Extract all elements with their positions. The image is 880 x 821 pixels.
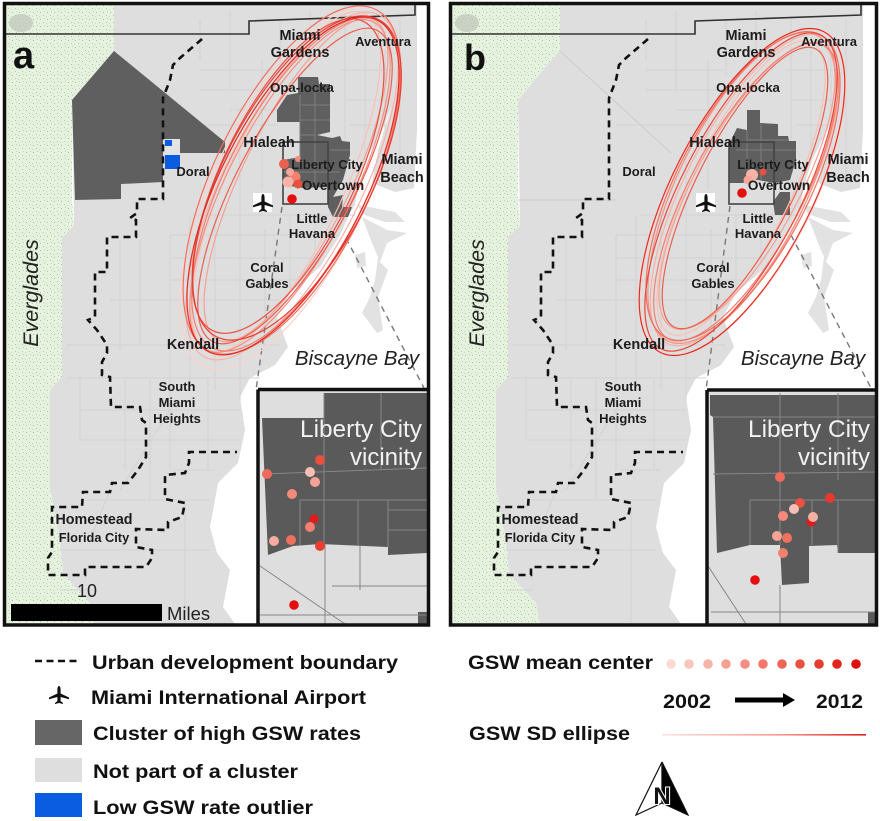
legend: time direction 2002 to 2012: 2002 <box>663 691 711 713</box>
place labels b: Opa-locka <box>716 80 781 95</box>
inset locator box and leader lines b <box>706 142 871 390</box>
place labels b: Miami <box>605 395 641 410</box>
place labels b: Kendall <box>613 337 665 353</box>
cluster of high GSW rates: west Doral <box>72 51 225 200</box>
inset locator box and leader lines <box>256 142 424 390</box>
legend item: low GSW rate outlier <box>35 793 313 819</box>
legend item: GSW mean center: GSW mean center <box>468 652 653 674</box>
place labels b: Little <box>742 211 774 226</box>
label: Biscayne Bay b: Biscayne Bay <box>741 347 867 370</box>
place labels a: Miami <box>279 28 321 44</box>
legend: right column <box>468 652 866 815</box>
inset title b <box>748 416 870 471</box>
icon: airport a <box>253 193 273 212</box>
place labels b: Aventura <box>801 34 858 49</box>
panel a: 2002–2012 map with Doral cluster <box>6 0 445 624</box>
icon: north arrow <box>636 762 688 815</box>
place labels b: Gardens <box>717 45 775 61</box>
cluster internal roads b <box>736 124 796 182</box>
panel b frame <box>450 4 876 625</box>
scale bar a <box>11 584 210 621</box>
inset title b: Liberty City <box>748 416 870 443</box>
place labels a: Florida City <box>59 530 130 545</box>
place labels b: Liberty City <box>737 157 810 172</box>
low GSW rate outliers <box>165 139 180 170</box>
place labels b: Hialeah <box>689 135 741 151</box>
place labels a: Gables <box>245 276 289 291</box>
legend: time direction 2002 to 2012: 2012 <box>816 691 863 713</box>
place labels b: Heights <box>599 411 647 426</box>
inset title a <box>300 416 422 471</box>
place labels a: Havana <box>289 226 336 241</box>
panel b: 2002–2012 map without Doral cluster <box>452 0 880 624</box>
place labels a: Hialeah <box>243 135 295 151</box>
place labels a: Miami <box>159 395 195 410</box>
legend item: urban development boundary: Urban development boundary <box>92 652 398 674</box>
icon: north arrow: N <box>653 783 671 810</box>
place labels b: Coral <box>696 260 730 275</box>
place labels b: Gables <box>691 276 735 291</box>
cluster of high GSW rates: central b <box>729 110 796 215</box>
legend: time direction 2002 to 2012 <box>663 691 863 713</box>
legend item: not part of a cluster: Not part of a cluster <box>93 761 298 783</box>
inset: Liberty City vicinity a <box>258 390 427 624</box>
legend item: cluster of high GSW rates <box>35 720 361 745</box>
place labels b: South <box>605 379 641 394</box>
GSW mean centers b <box>737 168 766 198</box>
GSW SD ellipses a <box>179 5 402 370</box>
legend item: low GSW rate outlier: Low GSW rate outlier <box>93 797 313 819</box>
place labels a <box>55 28 424 545</box>
place labels a: Overtown <box>302 178 364 193</box>
cluster of high GSW rates: central <box>277 77 352 217</box>
place labels a: Beach <box>380 170 424 186</box>
place labels a: Heights <box>153 411 201 426</box>
place labels b: Havana <box>735 226 782 241</box>
legend item: Miami International Airport: Miami International Airport <box>91 687 367 709</box>
base map a: land, Everglades, roads <box>6 5 430 624</box>
base map b: land, Everglades, roads <box>452 5 876 624</box>
place labels a: Gardens <box>271 45 329 61</box>
cluster internal roads <box>283 85 350 185</box>
inset mean centers a <box>262 455 325 610</box>
place labels b: Homestead <box>501 512 579 528</box>
inset cluster b <box>710 395 876 624</box>
inset mean centers b <box>750 472 835 585</box>
place labels b: Beach <box>826 170 870 186</box>
icon: airport b <box>696 193 716 212</box>
scale bar a: Miles <box>167 603 210 624</box>
label: Everglades b: Everglades <box>465 239 489 347</box>
place labels a: Liberty City <box>291 157 364 172</box>
inset cluster a <box>262 393 427 624</box>
place labels a: Opa-locka <box>270 80 335 95</box>
place labels a: Little <box>296 211 328 226</box>
panel letter b: b <box>464 37 486 78</box>
legend item: not part of a cluster <box>35 758 298 783</box>
place labels b: Miami <box>827 152 869 168</box>
legend item: cluster of high GSW rates: Cluster of high GSW rates <box>93 723 361 745</box>
label: Everglades a: Everglades <box>19 239 43 347</box>
label: Biscayne Bay a: Biscayne Bay <box>295 347 421 370</box>
former cluster edge lines b <box>518 51 671 200</box>
legend item: GSW mean center <box>468 652 861 674</box>
legend item: GSW SD ellipse: GSW SD ellipse <box>469 723 630 745</box>
place labels b: Overtown <box>748 178 810 193</box>
place labels b: Doral <box>622 164 656 179</box>
place labels a: Homestead <box>55 512 133 528</box>
urban development boundary a <box>48 39 237 575</box>
panel letter a: a <box>13 35 35 77</box>
panel a frame <box>4 4 428 625</box>
place labels b: Miami <box>725 28 767 44</box>
place labels a: Doral <box>176 164 210 179</box>
scale bar a: 10 <box>77 581 97 601</box>
inset title a: vicinity <box>350 444 422 471</box>
GSW mean centers a <box>279 156 302 204</box>
inset title a: Liberty City <box>300 416 422 443</box>
inset title b: vicinity <box>798 444 870 471</box>
GSW SD ellipses b <box>638 28 846 356</box>
inset: Liberty City vicinity b <box>706 390 876 624</box>
place labels b <box>501 28 870 545</box>
urban development boundary b <box>494 39 683 575</box>
place labels a: Miami <box>381 152 423 168</box>
place labels a: Aventura <box>355 34 412 49</box>
place labels a: Coral <box>250 260 284 275</box>
legend: left column <box>35 652 398 819</box>
place labels a: South <box>159 379 195 394</box>
place labels b: Florida City <box>505 530 576 545</box>
place labels a: Kendall <box>167 337 219 353</box>
